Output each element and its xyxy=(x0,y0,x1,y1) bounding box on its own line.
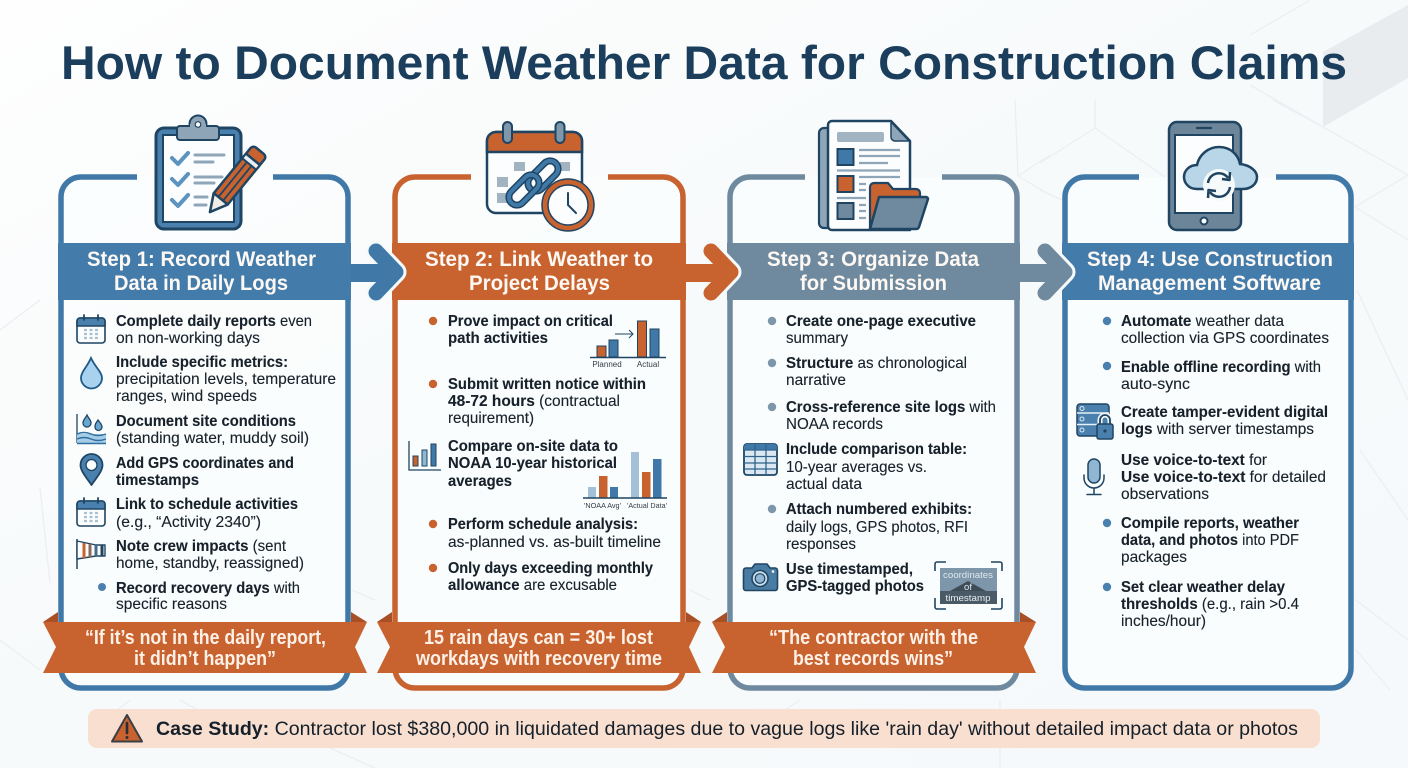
item: executive summary: summary xyxy=(786,330,848,347)
item: complete daily reports: on non-working days xyxy=(116,330,260,347)
item: pdf packages: Compile reports, weather xyxy=(1121,515,1299,532)
photo thumbnail with coordinates and timestamp: of xyxy=(964,582,972,593)
item: crew impacts: home, standby, reassigned) xyxy=(116,555,304,572)
quote ribbon: step 3 xyxy=(712,612,1036,673)
item: crew impacts xyxy=(77,538,304,572)
icon: map pin xyxy=(80,454,102,485)
chart: noaa average vs actual data xyxy=(583,452,668,510)
item: pdf packages: packages xyxy=(1121,549,1187,566)
item: recovery days: Record recovery days with xyxy=(116,580,300,597)
item: gps-tagged photos xyxy=(744,561,924,595)
panel: step 1 xyxy=(43,116,367,688)
item: comparison table xyxy=(744,441,967,493)
chart: planned vs actual xyxy=(590,321,666,369)
photo thumbnail with coordinates and timestamp xyxy=(935,562,1002,609)
item: voice-to-text xyxy=(1084,452,1326,503)
item: comparison table: actual data xyxy=(786,476,862,493)
item: schedule activities xyxy=(77,496,298,531)
item: crew impacts: Note crew impacts (sent xyxy=(116,538,287,555)
step 2 header band: Project Delays xyxy=(469,271,610,295)
stat ribbon: step 2: workdays with recovery time xyxy=(415,648,662,670)
icon: server with lock xyxy=(1077,404,1113,439)
item: chronological narrative: Structure as chronological xyxy=(786,355,967,372)
item: delay thresholds: Set clear weather delay xyxy=(1121,579,1285,596)
item: voice-to-text: Use voice-to-text for xyxy=(1121,452,1267,469)
chart: noaa average vs actual data: 'Actual Data' xyxy=(627,501,668,510)
quote ribbon: step 1 xyxy=(43,612,367,673)
chart: noaa average vs actual data: 'NOAA Avg' xyxy=(584,501,622,510)
item: gps-tagged photos: Use timestamped, xyxy=(786,561,913,578)
step 2 header band: Step 2: Link Weather to xyxy=(425,247,653,271)
chart: planned vs actual: Actual xyxy=(637,360,659,369)
item: schedule activities: Link to schedule activities xyxy=(116,496,298,513)
item: compare noaa data xyxy=(409,438,618,490)
item: gps-tagged photos: GPS-tagged photos xyxy=(786,578,924,595)
item: pdf packages xyxy=(1103,515,1299,566)
item: numbered exhibits: daily logs, GPS photos, RFI xyxy=(786,519,968,536)
item: gps coordinates: timestamps xyxy=(116,472,199,489)
case study banner: Case Study: Contractor lost $380,000 in liquidated damages due to vague logs like 'rain day' without detailed impact data or photos xyxy=(156,718,1298,740)
item: numbered exhibits xyxy=(768,501,972,553)
arrow: step 1 to step 2 xyxy=(351,251,396,293)
item: compare noaa data: NOAA 10-year historical xyxy=(448,455,617,472)
stat ribbon: step 2 xyxy=(377,612,701,673)
icon: tablet with cloud sync xyxy=(1169,122,1257,230)
item: monthly allowance xyxy=(429,560,653,594)
icon: small bar chart xyxy=(409,441,441,470)
item: cross-reference xyxy=(768,399,996,433)
icon: calendar, chain link and clock xyxy=(487,122,594,231)
item: schedule analysis: Perform schedule analysis: xyxy=(448,516,638,533)
item: tamper-evident logs xyxy=(1077,404,1328,439)
icon: water drop xyxy=(81,358,102,388)
icon: calendar xyxy=(77,315,105,343)
item: offline recording xyxy=(1103,359,1321,393)
arrow: step 2 to step 3 xyxy=(686,251,731,293)
item: recovery days: specific reasons xyxy=(116,596,227,613)
arrow: step 3 to step 4 xyxy=(1020,251,1065,293)
item: specific metrics: Include specific metrics: xyxy=(116,354,288,371)
item: voice-to-text: observations xyxy=(1121,486,1209,503)
item: delay thresholds: thresholds (e.g., rain >0.4 xyxy=(1121,596,1299,613)
item: compare noaa data: Compare on-site data to xyxy=(448,438,618,455)
item: comparison table: Include comparison table: xyxy=(786,441,967,458)
quote ribbon: step 1: it didn’t happen” xyxy=(134,648,276,670)
item: critical path: Prove impact on critical xyxy=(448,313,613,330)
item: site conditions: (standing water, muddy soil) xyxy=(116,430,309,447)
item: numbered exhibits: responses xyxy=(786,536,856,553)
item: site conditions xyxy=(77,413,309,447)
icon: microphone xyxy=(1084,459,1104,494)
panel: step 2 xyxy=(377,122,701,688)
icon: table xyxy=(744,444,777,475)
item: automate collection: Automate weather data xyxy=(1121,313,1284,330)
item: critical path: path activities xyxy=(448,330,548,347)
item: tamper-evident logs: logs with server timestamps xyxy=(1121,421,1314,438)
item: compare noaa data: averages xyxy=(448,473,512,490)
icon: warning triangle xyxy=(112,715,142,742)
stat ribbon: step 2: 15 rain days can = 30+ lost xyxy=(424,627,653,649)
item: complete daily reports xyxy=(77,313,312,347)
panel: step 4 xyxy=(1062,122,1354,688)
item: site conditions: Document site conditions xyxy=(116,413,296,430)
step 1 header band: Step 1: Record Weather xyxy=(87,247,317,271)
step 3 header band: Step 3: Organize Data xyxy=(767,247,980,271)
icon: calendar xyxy=(77,498,105,526)
step 1 header band: Data in Daily Logs xyxy=(114,271,288,295)
item: numbered exhibits: Attach numbered exhibits: xyxy=(786,501,972,518)
item: written notice: requirement) xyxy=(448,410,534,427)
quote ribbon: step 1: “If it’s not in the daily report, xyxy=(85,627,326,649)
quote ribbon: step 3: “The contractor with the xyxy=(769,627,978,649)
item: monthly allowance: Only days exceeding monthly xyxy=(448,560,653,577)
item: executive summary xyxy=(768,313,976,347)
item: written notice xyxy=(429,376,646,427)
photo thumbnail with coordinates and timestamp: coordinates xyxy=(943,570,993,581)
item: offline recording: Enable offline recording with xyxy=(1121,359,1321,376)
item: chronological narrative: narrative xyxy=(786,372,846,389)
item: executive summary: Create one-page executive xyxy=(786,313,976,330)
item: specific metrics: precipitation levels, temperature xyxy=(116,371,336,388)
step 3 header band: for Submission xyxy=(800,271,947,295)
item: gps coordinates xyxy=(80,454,294,489)
item: monthly allowance: allowance are excusable xyxy=(448,577,617,594)
item: critical path xyxy=(429,313,613,347)
item: automate collection xyxy=(1103,313,1329,347)
photo thumbnail with coordinates and timestamp: timestamp xyxy=(946,593,990,604)
item: comparison table: 10-year averages vs. xyxy=(786,459,927,476)
icon: camera xyxy=(744,564,778,590)
item: cross-reference: Cross-reference site logs with xyxy=(786,399,996,416)
item: chronological narrative xyxy=(768,355,967,389)
item: recovery days xyxy=(98,580,300,613)
step 1 header band xyxy=(58,243,351,300)
item: cross-reference: NOAA records xyxy=(786,416,883,433)
chart: planned vs actual: Planned xyxy=(592,360,622,369)
item: schedule analysis xyxy=(429,516,661,551)
step 2 header band xyxy=(392,243,686,300)
item: specific metrics: ranges, wind speeds xyxy=(116,388,257,405)
item: gps coordinates: Add GPS coordinates and xyxy=(116,455,294,472)
item: tamper-evident logs: Create tamper-evident digital xyxy=(1121,404,1328,421)
title: How to Document Weather Data for Construction Claims xyxy=(61,37,1347,90)
panel: step 3 xyxy=(712,121,1036,688)
case study banner xyxy=(88,709,1320,748)
icon: windsock xyxy=(77,539,105,569)
item: schedule analysis: as-planned vs. as-built timeline xyxy=(448,534,661,551)
icon: document and folder xyxy=(819,121,928,230)
step 4 header band xyxy=(1062,243,1354,300)
step 3 header band xyxy=(727,243,1020,300)
item: written notice: Submit written notice within xyxy=(448,376,646,393)
icon: standing water xyxy=(77,414,106,444)
item: voice-to-text: Use voice-to-text for detailed xyxy=(1121,469,1326,486)
item: delay thresholds: inches/hour) xyxy=(1121,613,1206,630)
item: complete daily reports: Complete daily reports even xyxy=(116,313,312,330)
step 4 header band: Management Software xyxy=(1098,271,1321,295)
icon: clipboard and pencil xyxy=(156,116,267,229)
item: pdf packages: data, and photos into PDF xyxy=(1121,532,1299,549)
quote ribbon: step 3: best records wins” xyxy=(793,648,953,670)
item: automate collection: collection via GPS coordinates xyxy=(1121,330,1329,347)
item: offline recording: auto-sync xyxy=(1121,376,1190,393)
item: delay thresholds xyxy=(1103,579,1299,630)
item: schedule activities: (e.g., “Activity 2340”) xyxy=(116,514,261,531)
item: written notice: 48-72 hours (contractual xyxy=(448,393,620,410)
item: specific metrics xyxy=(81,354,336,405)
step 4 header band: Step 4: Use Construction xyxy=(1087,247,1333,271)
